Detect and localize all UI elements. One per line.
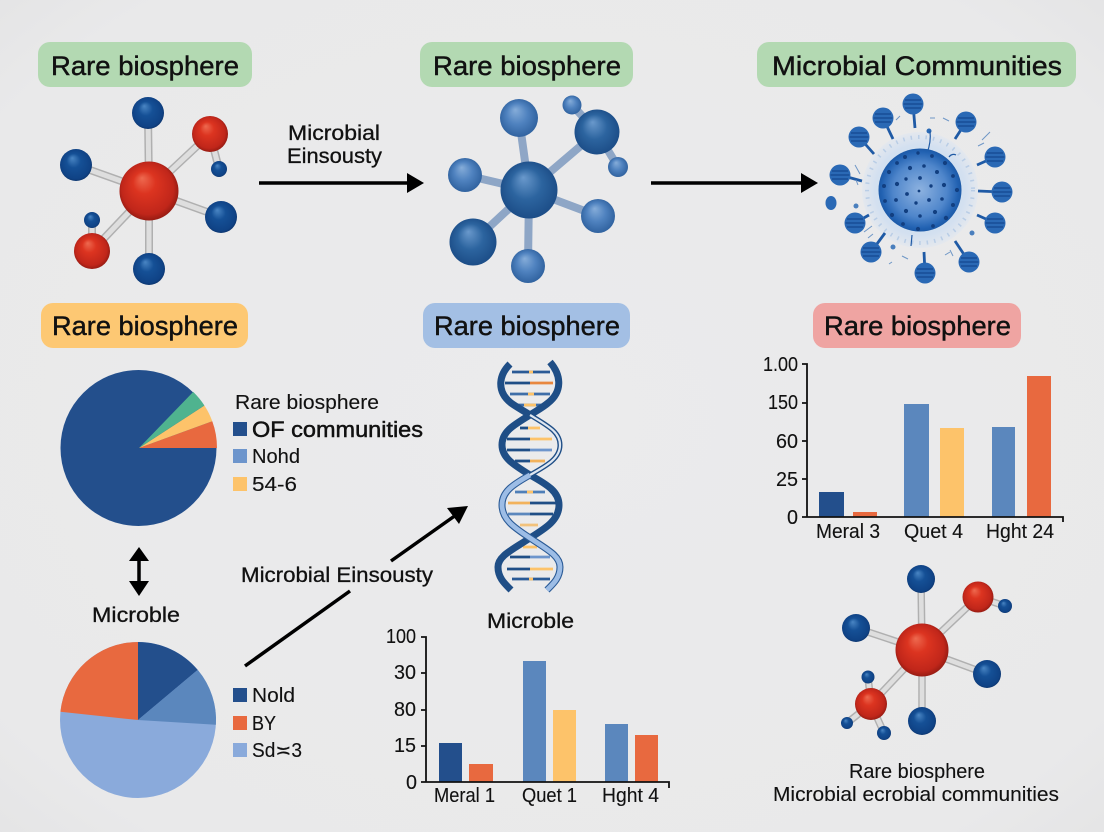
arrow: first to second molecule	[259, 173, 424, 193]
legend: communities pie: Nohd	[252, 446, 300, 468]
header: rare biosphere, top centre: Rare biosphere	[433, 51, 621, 81]
header: rare biosphere, pink	[813, 303, 1021, 348]
legend: microbe pie: Nold	[252, 685, 295, 707]
header: rare biosphere, top left: Rare biosphere	[51, 51, 239, 81]
pie chart: communities	[60, 370, 217, 526]
header: rare biosphere, pink: Rare biosphere	[824, 311, 1011, 341]
legend: microbe pie: BY	[252, 713, 276, 735]
bar chart: meral quet hght, upper: Quet 4	[904, 521, 963, 543]
legend: microbe pie: Sd≍3	[252, 740, 302, 762]
header: rare biosphere, top left	[38, 42, 252, 87]
icon: dna double helix	[498, 362, 560, 590]
header: rare biosphere, orange	[41, 303, 248, 348]
header: microbial communities: Microbial Communities	[772, 51, 1062, 81]
bar chart: meral quet hght, upper: 25	[776, 469, 798, 491]
bar chart: meral quet hght, upper: Meral 3	[816, 521, 880, 543]
header: rare biosphere, orange: Rare biosphere	[52, 311, 238, 341]
bar chart: meral quet hght, upper: Hght 24	[986, 521, 1054, 543]
header: rare biosphere, blue: Rare biosphere	[434, 311, 620, 341]
label: microble, above lower chart: Microble	[487, 610, 574, 633]
caption: lower right: Rare biosphere	[849, 761, 985, 783]
bar chart: meral quet hght, upper	[763, 354, 1063, 543]
header: microbial communities	[757, 42, 1076, 87]
label: microbial einsousty, diagonal arrow: Microbial Einsousty	[241, 564, 434, 587]
header: rare biosphere, blue	[423, 303, 630, 348]
bar chart: meral quet hght, lower: 100	[386, 626, 416, 648]
arrow: double headed vertical	[129, 547, 149, 596]
icon: blue molecule, top centre	[448, 96, 628, 283]
arrow: second molecule to microbe	[651, 173, 818, 193]
bar chart: meral quet hght, lower: Hght 4	[602, 785, 659, 807]
legend: communities pie	[233, 392, 423, 496]
label: microble, left: Microble	[92, 604, 180, 627]
caption: lower right	[773, 761, 1059, 806]
bar chart: meral quet hght, lower: 0	[406, 772, 417, 794]
legend: microbe pie	[233, 685, 302, 762]
bar chart: meral quet hght, lower: Meral 1	[434, 785, 495, 807]
bar chart: meral quet hght, lower: 30	[394, 662, 416, 684]
bar chart: meral quet hght, upper: 1.00	[763, 354, 798, 376]
legend: communities pie: 54-6	[252, 474, 297, 496]
bar chart: meral quet hght, lower: Quet 1	[522, 785, 577, 807]
bar chart: meral quet hght, upper: 0	[787, 507, 798, 529]
arrow label: microbial einsousty: Einsousty	[287, 145, 383, 168]
bar chart: meral quet hght, upper: 150	[768, 392, 798, 414]
arrow label: microbial einsousty	[287, 122, 383, 168]
arrow: diagonal to dna	[245, 506, 468, 666]
legend: communities pie: Rare biosphere	[235, 392, 379, 414]
arrow label: microbial einsousty: Microbial	[288, 122, 380, 145]
bar chart: meral quet hght, upper: 60	[776, 431, 798, 453]
caption: lower right: Microbial ecrobial communities	[773, 784, 1059, 806]
icon: microbial cell with spokes	[826, 94, 1012, 284]
bar chart: meral quet hght, lower: 80	[394, 699, 416, 721]
legend: communities pie: OF communities	[252, 417, 423, 442]
header: rare biosphere, top centre	[420, 42, 633, 87]
bar chart: meral quet hght, lower: 15	[394, 735, 416, 757]
bar chart: meral quet hght, lower	[386, 626, 669, 807]
icon: red and blue molecule, top left	[60, 97, 237, 285]
pie chart: microbe	[60, 642, 216, 798]
icon: red and blue molecule, lower right	[841, 565, 1012, 740]
